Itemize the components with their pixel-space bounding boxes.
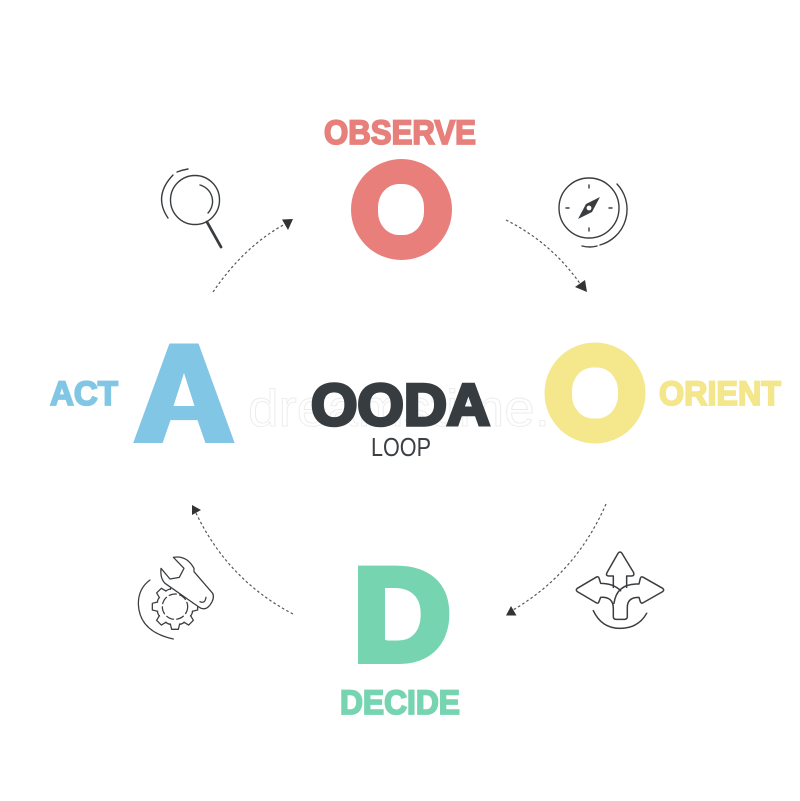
icon: magnifying glass — [162, 169, 221, 247]
letter O: observe: O — [353, 145, 450, 279]
letter A: act: A — [137, 320, 231, 466]
letter D: decide: D — [354, 542, 450, 687]
arrow: observe to orient — [506, 220, 587, 292]
heading: decide: DECIDE — [340, 684, 460, 722]
arrow: decide to act — [192, 505, 293, 614]
heading: observe: OBSERVE — [324, 114, 476, 152]
arrow: orient to decide — [506, 504, 606, 616]
heading: orient: ORIENT — [659, 375, 781, 413]
icon: branching arrows — [576, 552, 664, 628]
icon: compass — [559, 178, 627, 247]
arrow: act to observe — [213, 219, 293, 292]
watermark: dreamstime. — [248, 380, 550, 438]
title: OODA: OODA — [311, 373, 490, 438]
icon: gear and wrench — [138, 557, 213, 639]
letter O: orient: O — [546, 328, 644, 462]
heading: act: ACT — [50, 375, 118, 413]
subtitle: LOOP: LOOP — [371, 432, 431, 462]
